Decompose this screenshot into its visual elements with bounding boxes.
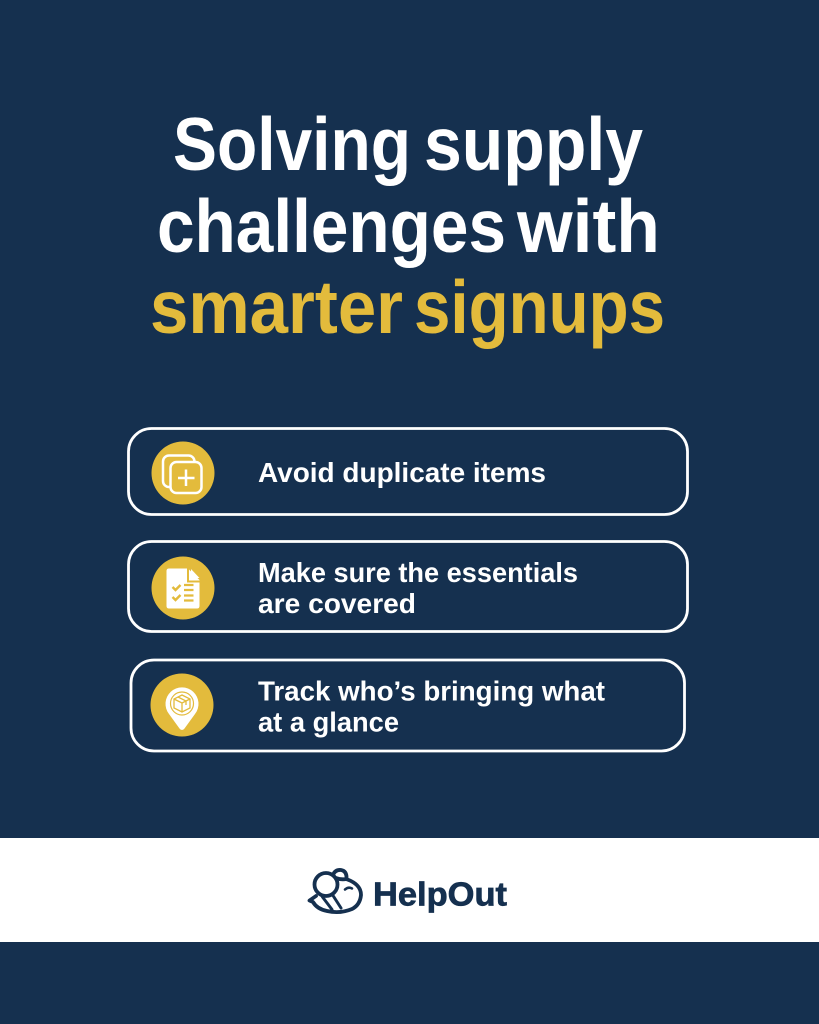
icon: location pin with box <box>150 674 214 736</box>
title: Solving <box>173 102 411 186</box>
title: challenges <box>157 184 506 268</box>
footer band <box>0 838 819 942</box>
panel: avoid duplicate items <box>128 428 688 514</box>
label: Avoid duplicate items <box>258 457 546 488</box>
title <box>150 102 665 349</box>
panel: essentials covered <box>128 542 688 632</box>
icon: bee logo <box>310 870 361 912</box>
title: signups <box>414 265 665 349</box>
logo wordmark: HelpOut <box>373 876 507 912</box>
label <box>258 676 605 738</box>
label: are covered <box>258 588 416 619</box>
title: smarter <box>150 265 403 349</box>
icon: duplicate plus <box>152 442 214 504</box>
icon: checklist document <box>152 556 214 620</box>
title: supply <box>424 102 643 186</box>
label: Make sure the essentials <box>258 557 578 588</box>
label: at a glance <box>258 706 399 738</box>
panel: track who's bringing what <box>131 660 684 751</box>
title: with <box>516 184 660 268</box>
label: Track who’s bringing what <box>258 676 605 706</box>
label <box>258 557 578 619</box>
